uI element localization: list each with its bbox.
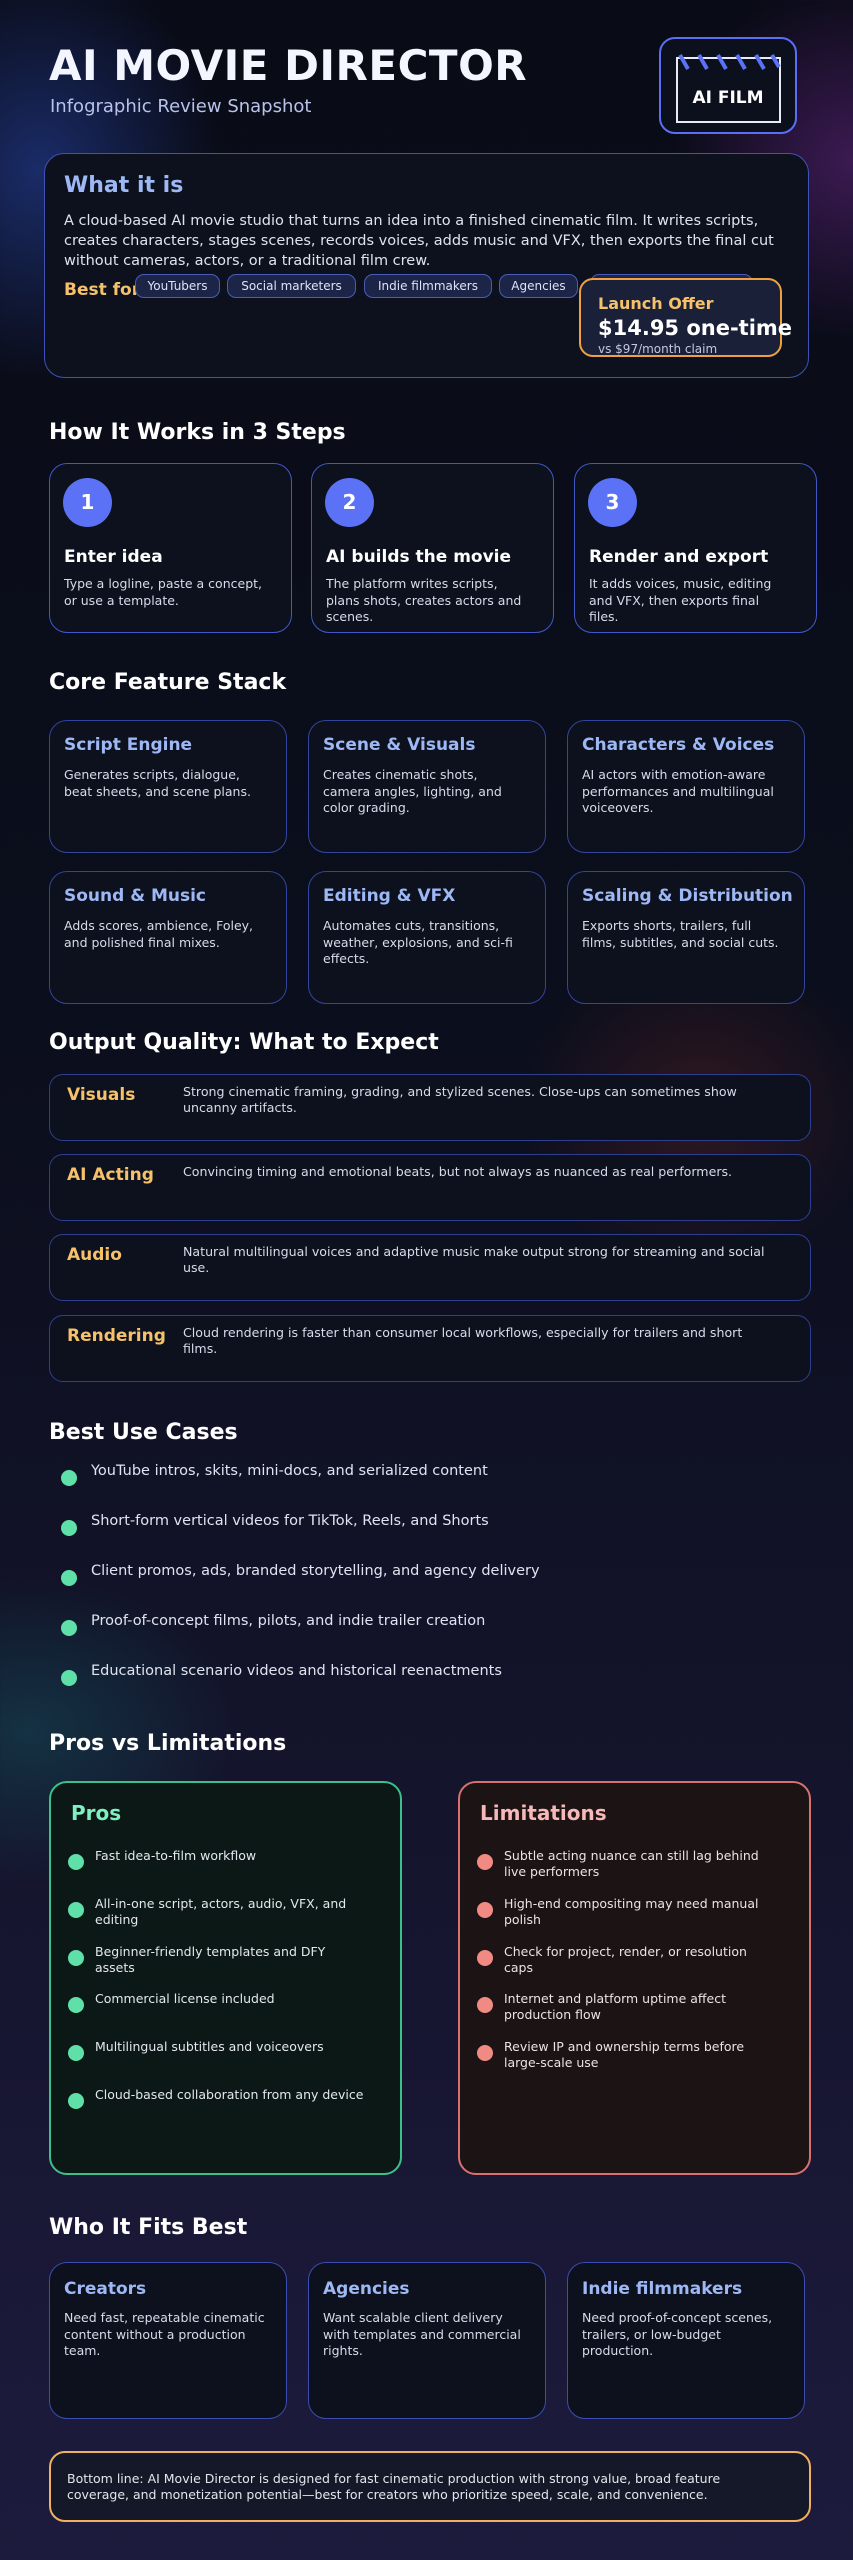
panel: creators [49,2262,287,2419]
panel: pros: assets [95,1960,135,1975]
panel: indie filmmakers: Indie filmmakers [582,2279,742,2299]
heading: best use cases: Best Use Cases [49,1420,238,1445]
panel: step 3: files. [589,609,619,624]
panel: characters & voices [567,720,805,853]
panel: step 2: AI builds the movie [326,547,511,567]
callout: launch offer [579,278,782,357]
panel: indie filmmakers: production. [582,2343,653,2358]
description: creates characters, stages scenes, records voices, adds music and VFX, then exports the final cut [64,233,774,249]
panel: step 1: Enter idea [64,547,163,567]
list: use cases: Short-form vertical videos for TikTok, Reels, and Shorts [91,1513,489,1529]
panel: step 3: 3 [606,490,619,514]
description [64,213,774,269]
row: visuals [49,1074,811,1141]
row: audio: Natural multilingual voices and adaptive music make output strong for streaming and social [183,1244,764,1259]
best for label: Best for: [64,280,147,300]
row: rendering [49,1315,811,1382]
panel: limitations: polish [504,1912,541,1927]
row: visuals: uncanny artifacts. [183,1100,297,1115]
row: rendering: films. [183,1341,217,1356]
panel: editing & vfx: Automates cuts, transitions, [323,918,499,933]
panel: pros: Pros [71,1801,121,1825]
callout: launch offer: $14.95 one-time [598,316,792,340]
heading: who it fits best: Who It Fits Best [49,2215,247,2240]
list: use cases: Client promos, ads, branded storytelling, and agency delivery [91,1563,540,1579]
panel: characters & voices: voiceovers. [582,800,653,815]
chips: Agencies [511,279,566,293]
callout: bottom line [49,2451,811,2522]
panel: pros: Commercial license included [95,1991,275,2006]
panel: script engine: beat sheets, and scene plans. [64,784,251,798]
panel: limitations: Internet and platform uptime affect [504,1991,726,2006]
heading: what it is: What it is [64,173,183,198]
panel: limitations: Check for project, render, or resolution [504,1944,747,1959]
panel: indie filmmakers: Need proof-of-concept scenes, [582,2310,772,2325]
panel: creators: content without a production [64,2326,246,2342]
panel: scaling & distribution: Exports shorts, trailers, full [582,918,751,933]
chips: YouTubers [148,279,207,293]
heading: how it works: How It Works in 3 Steps [49,420,346,445]
list: use cases: Proof-of-concept films, pilots, and indie trailer creation [91,1613,485,1629]
row: ai acting [49,1154,811,1221]
panel: editing & vfx: weather, explosions, and sci-fi [323,934,513,950]
panel: step 2 [311,463,554,633]
panel: characters & voices: performances and multilingual [582,784,774,798]
row: ai acting: AI Acting [67,1165,154,1185]
panel: creators: Need fast, repeatable cinematic [64,2310,265,2325]
row: ai acting: Convincing timing and emotional beats, but not always as nuanced as real performers. [183,1164,732,1179]
heading: pros vs limitations: Pros vs Limitations [49,1731,286,1756]
icon: AI FILM clapperboard: AI FILM [692,88,764,108]
panel: pros: All-in-one script, actors, audio, VFX, and [95,1896,346,1911]
panel: script engine: Script Engine [64,735,192,755]
row: visuals: Strong cinematic framing, grading, and stylized scenes. Close-ups can sometimes show [183,1084,737,1099]
callout: bottom line: Bottom line: AI Movie Director is designed for fast cinematic production with strong value, broad feature [67,2471,720,2486]
panel: scaling & distribution: films, subtitles, and social cuts. [582,934,779,950]
panel: sound & music: Sound & Music [64,886,206,906]
panel: pros [49,1781,402,2175]
panel: pros: Multilingual subtitles and voiceovers [95,2039,324,2054]
panel: creators: Creators [64,2279,146,2299]
panel: script engine: Generates scripts, dialogue, [64,767,240,782]
panel: what it is [44,153,809,378]
panel: characters & voices: AI actors with emotion-aware [582,767,765,782]
description: A cloud-based AI movie studio that turns an idea into a finished cinematic film. It writes scripts, [64,213,758,229]
panel: step 3: and VFX, then exports final [589,592,759,608]
row: rendering: Cloud rendering is faster than consumer local workflows, especially for trailers and short [183,1325,742,1340]
panel: scene & visuals [308,720,546,853]
panel: editing & vfx: Editing & VFX [323,886,455,906]
panel: agencies: rights. [323,2343,363,2358]
panel: limitations: Limitations [480,1801,607,1825]
panel: pros: Cloud-based collaboration from any device [95,2087,363,2102]
panel: limitations [458,1781,811,2175]
row: audio: Audio [67,1245,122,1265]
panel: limitations: large-scale use [504,2055,598,2070]
panel: editing & vfx: effects. [323,951,369,966]
subtitle: Infographic Review Snapshot [50,96,311,117]
panel: step 3: Render and export [589,547,768,567]
panel: step 1 [49,463,292,633]
panel: sound & music: Adds scores, ambience, Foley, [64,918,253,933]
chips: Indie filmmakers [378,279,478,293]
panel: limitations: live performers [504,1864,599,1879]
panel: step 2: 2 [343,490,356,514]
heading: output quality: Output Quality: What to Expect [49,1030,439,1055]
callout: launch offer: Launch Offer [598,294,714,313]
panel: characters & voices: Characters & Voices [582,735,774,755]
panel: scene & visuals: Scene & Visuals [323,735,475,755]
panel: scene & visuals: camera angles, lighting, and [323,784,502,798]
panel: agencies: with templates and commercial [323,2326,521,2342]
panel: sound & music: and polished final mixes. [64,934,220,950]
row: visuals: Visuals [67,1085,135,1105]
panel: sound & music [49,871,287,1004]
panel: limitations: Review IP and ownership terms before [504,2039,744,2054]
title: AI MOVIE DIRECTOR [49,41,527,90]
heading: core feature stack: Core Feature Stack [49,670,286,695]
panel: step 1: 1 [81,490,94,514]
panel: pros: Beginner-friendly templates and DFY [95,1944,325,1959]
panel: agencies: Agencies [323,2279,410,2299]
panel: step 1: Type a logline, paste a concept, [64,576,262,591]
panel: limitations: caps [504,1960,533,1975]
panel: limitations: Subtle acting nuance can still lag behind [504,1848,759,1863]
panel: step 3: It adds voices, music, editing [589,576,771,591]
panel: step 3 [574,463,817,633]
row: audio [49,1234,811,1301]
panel: limitations: High-end compositing may need manual [504,1896,758,1911]
description: without cameras, actors, or a traditional film crew. [64,253,430,269]
callout: launch offer: vs $97/month claim [598,342,717,356]
row: audio: use. [183,1260,209,1275]
panel: pros: editing [95,1912,138,1927]
panel: editing & vfx [308,871,546,1004]
list: use cases: YouTube intros, skits, mini-docs, and serialized content [91,1463,488,1479]
panel: step 2: scenes. [326,609,373,624]
list: use cases: Educational scenario videos and historical reenactments [91,1663,502,1679]
row: rendering: Rendering [67,1326,166,1346]
panel: limitations: production flow [504,2007,601,2022]
panel: indie filmmakers: trailers, or low-budget [582,2326,721,2342]
panel: agencies: Want scalable client delivery [323,2310,503,2325]
chips: Social marketers [241,279,342,293]
callout: bottom line: coverage, and monetization potential—best for creators who prioritize speed, scale, and convenience. [67,2487,708,2502]
list: use cases [61,1463,540,1686]
icon: AI FILM clapperboard [659,37,797,134]
panel: step 1: or use a template. [64,592,179,608]
panel: scene & visuals: color grading. [323,800,410,815]
panel: pros: Fast idea-to-film workflow [95,1848,256,1863]
panel: step 2: plans shots, creates actors and [326,592,521,608]
panel: scene & visuals: Creates cinematic shots, [323,767,478,782]
panel: creators: team. [64,2343,100,2358]
chips [135,274,752,298]
panel: agencies [308,2262,546,2419]
panel: step 2: The platform writes scripts, [326,576,498,591]
panel: script engine [49,720,287,853]
panel: indie filmmakers [567,2262,805,2419]
panel: scaling & distribution [567,871,805,1004]
panel: scaling & distribution: Scaling & Distribution [582,886,793,906]
